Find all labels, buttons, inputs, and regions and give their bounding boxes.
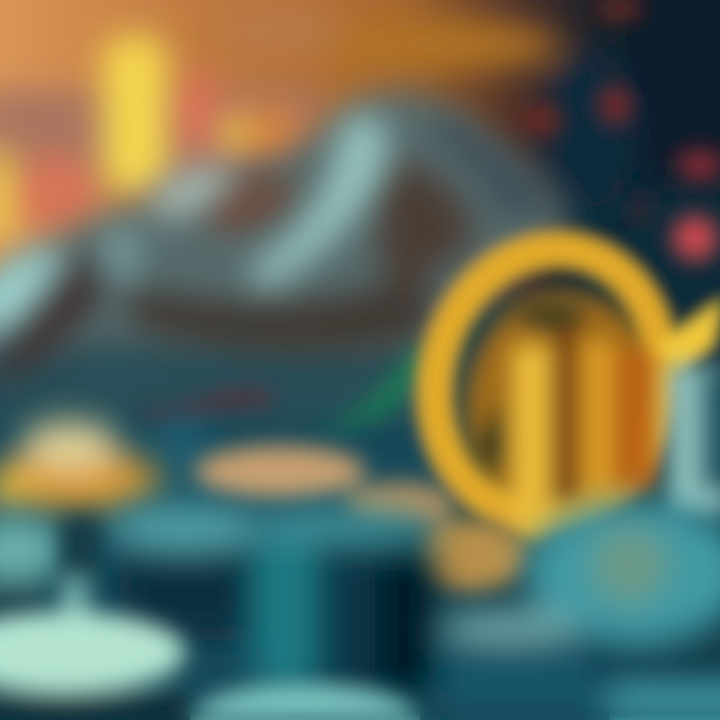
gold coin with bars: [407, 225, 720, 540]
gold pile: left coin top: [0, 421, 160, 510]
right dark sky lower: [560, 180, 720, 410]
mountain shadows and ridges: [0, 110, 560, 385]
lower dark backdrop: [0, 410, 450, 720]
mountain highlights: [0, 114, 388, 340]
teal coin lower right: [438, 500, 720, 720]
bars: [478, 302, 654, 540]
background sky: [0, 0, 720, 300]
large pale coin bottom left: [0, 612, 190, 720]
bottom pale coin: [190, 684, 420, 720]
sky glow colours: [0, 5, 640, 235]
teal coin stacks: [0, 503, 435, 705]
yellow light column: [0, 35, 251, 240]
gold pile: centre coins: [195, 446, 528, 591]
left coin stem: [62, 515, 98, 660]
coin glint: [655, 295, 720, 375]
red sparks: [518, 0, 720, 260]
mountain body: [0, 91, 575, 440]
right pale teal column: [668, 365, 720, 515]
coin ring: [407, 225, 689, 539]
coin inner: [465, 292, 665, 528]
green and red chart streak: [150, 360, 420, 440]
